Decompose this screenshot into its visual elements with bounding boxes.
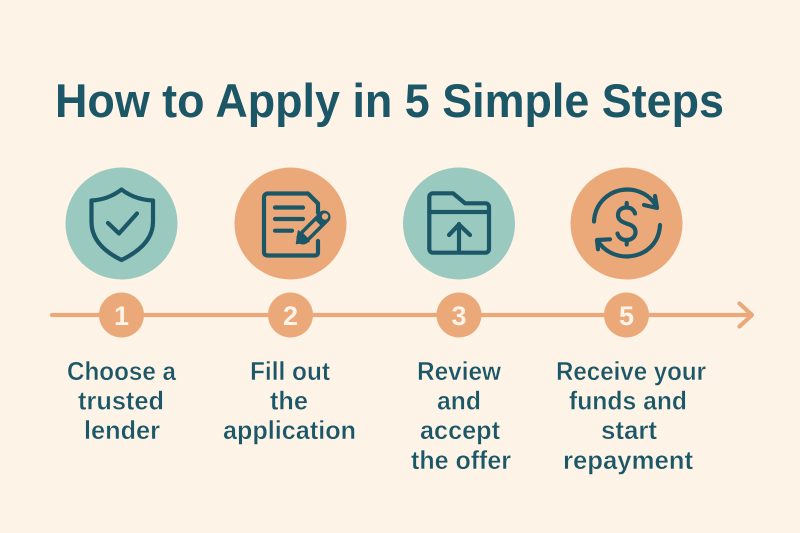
label: step 5: start bbox=[601, 415, 657, 445]
label: step 1: lender bbox=[84, 415, 160, 445]
step number 5: 5 bbox=[619, 301, 634, 331]
label: step 3 bbox=[411, 356, 511, 475]
label: step 5 bbox=[556, 356, 706, 475]
label: step 3: and bbox=[437, 386, 481, 416]
label: step 5: Receive your bbox=[556, 356, 706, 386]
step number 1 bbox=[99, 292, 144, 338]
label: step 3: Review bbox=[417, 356, 502, 386]
label: step 5: funds and bbox=[569, 386, 687, 416]
label: step 3: the offer bbox=[411, 445, 511, 475]
label: step 2: the bbox=[270, 386, 308, 416]
title: How to Apply in 5 Simple Steps bbox=[55, 74, 724, 127]
step number 5 bbox=[604, 292, 649, 338]
label: step 5: repayment bbox=[563, 445, 693, 475]
icon: folder with upload arrow bbox=[403, 168, 515, 280]
label: step 2: Fill out bbox=[250, 356, 330, 386]
pencil bbox=[296, 213, 328, 244]
step number 3: 3 bbox=[451, 301, 467, 331]
label: step 1: Choose a bbox=[67, 356, 176, 386]
icon: shield with check bbox=[66, 168, 178, 280]
label: step 1: trusted bbox=[78, 386, 164, 416]
label: step 2 bbox=[223, 356, 356, 445]
timeline arrow bbox=[52, 304, 752, 326]
icon: dollar with circular arrows bbox=[570, 168, 682, 280]
step number 2: 2 bbox=[283, 301, 298, 331]
label: step 1 bbox=[67, 356, 176, 445]
step number 1: 1 bbox=[114, 301, 129, 331]
step number 2 bbox=[268, 292, 313, 338]
label: step 3: accept bbox=[420, 415, 500, 445]
step number 3 bbox=[436, 292, 482, 338]
icon: document with pencil bbox=[234, 168, 346, 280]
label: step 2: application bbox=[223, 415, 356, 445]
